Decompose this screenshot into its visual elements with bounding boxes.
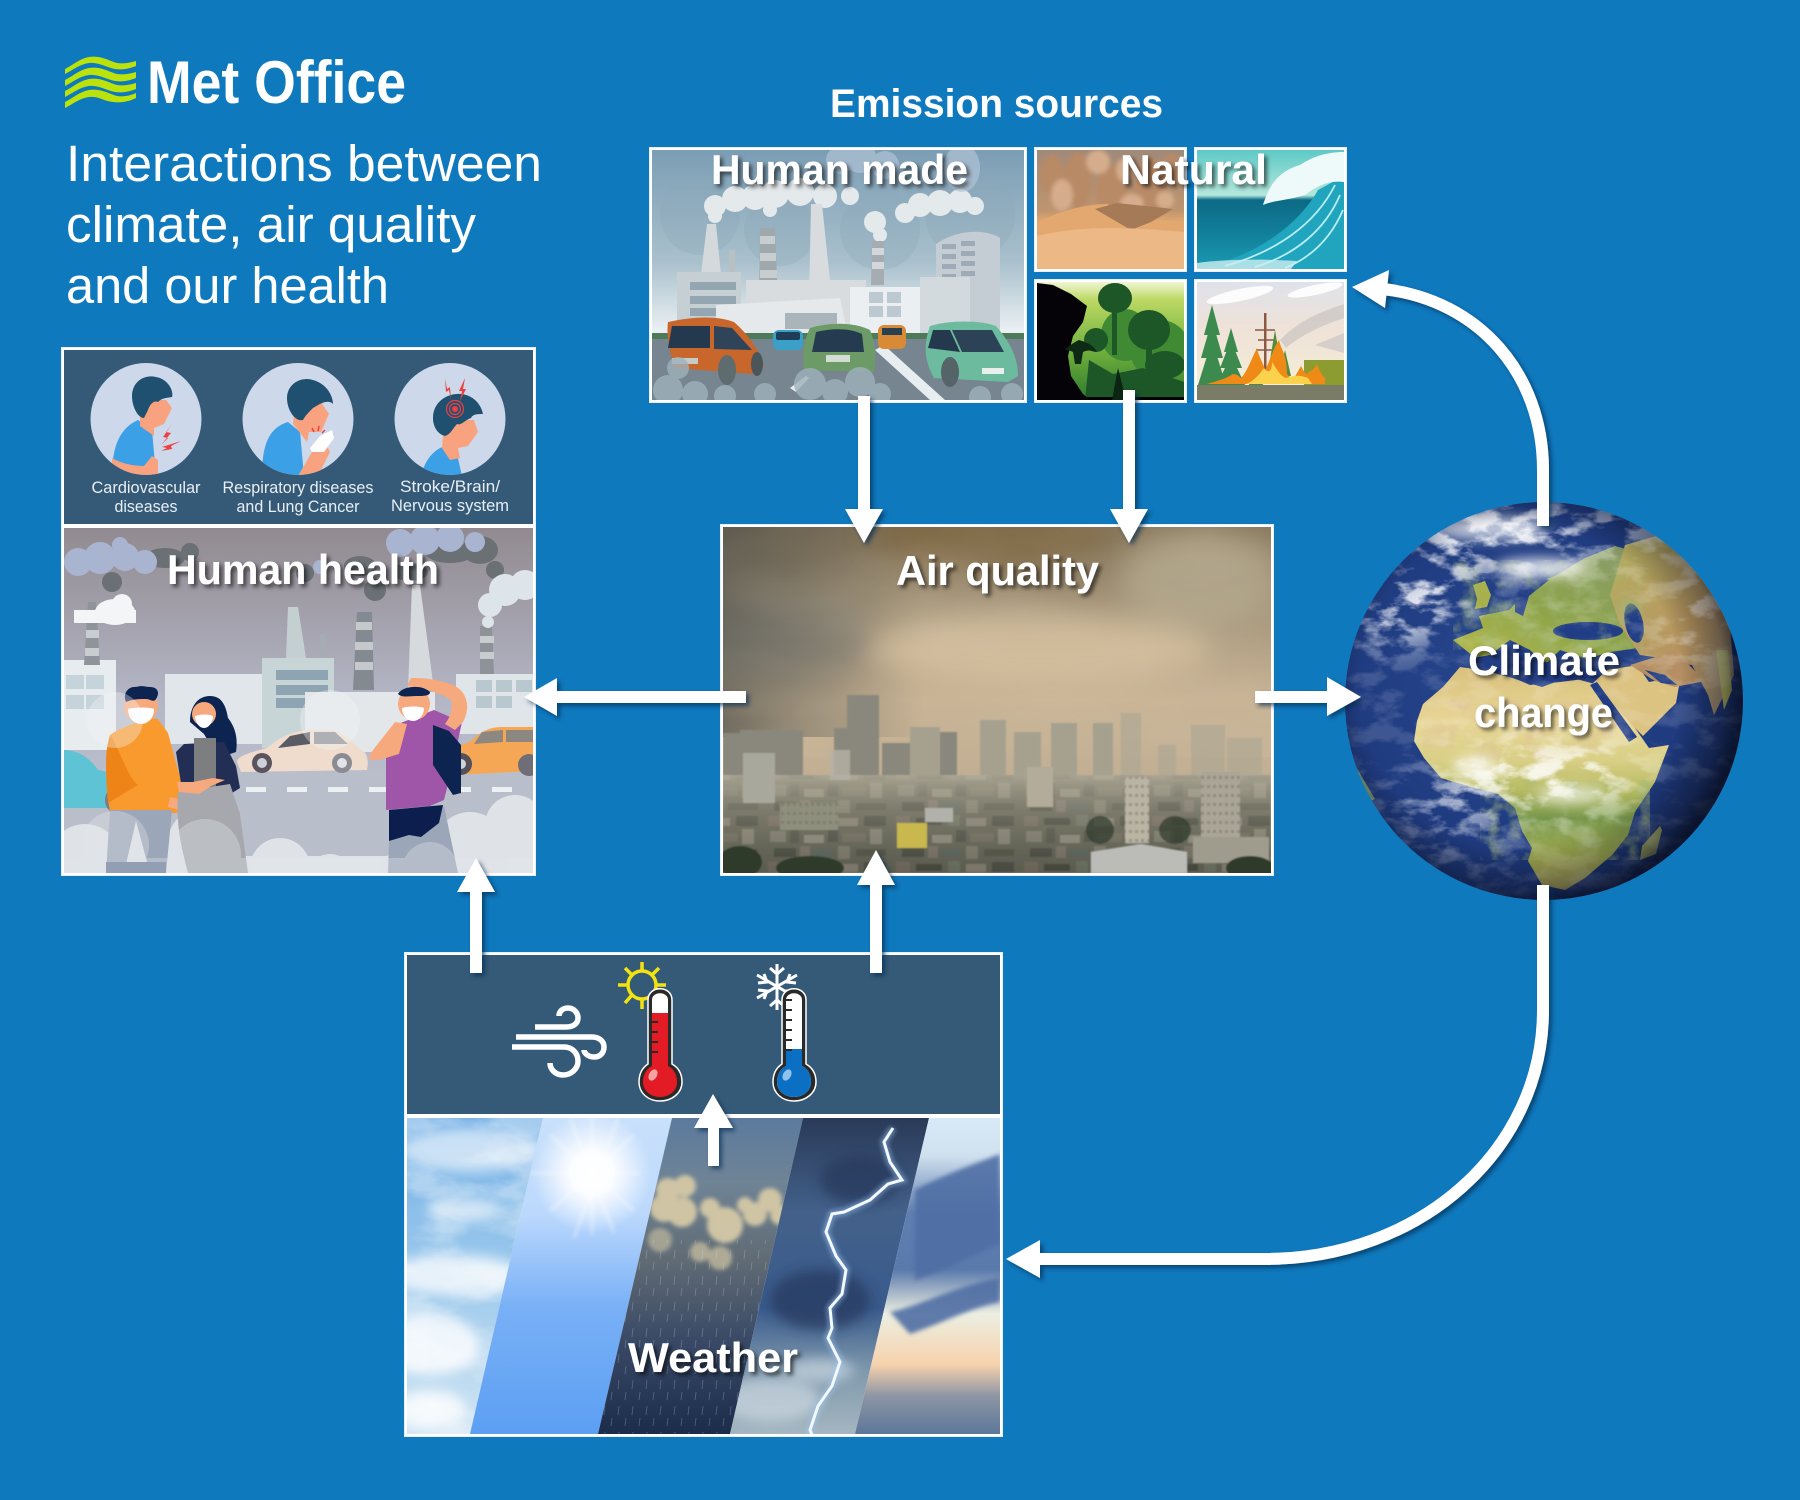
arrow: climate change to natural emissions bbox=[1352, 270, 1543, 526]
arrow: weather photo to weather icons bbox=[694, 1094, 733, 1166]
road bbox=[652, 335, 1024, 400]
land noise bbox=[1453, 560, 1643, 650]
ground fog bbox=[88, 811, 458, 873]
text: condition labels: Stroke/Brain/ bbox=[400, 477, 500, 496]
car: beige bbox=[237, 730, 368, 773]
label: Weather: Weather bbox=[628, 1334, 798, 1381]
smoke clouds bbox=[704, 178, 984, 242]
title: Interactions between bbox=[66, 135, 542, 192]
icon: cardiovascular bbox=[90, 363, 202, 476]
illustration: polluted street bbox=[64, 528, 533, 873]
car: teal bbox=[926, 322, 1018, 387]
car: orange bbox=[667, 318, 764, 385]
logo wordmark: Met Office bbox=[147, 49, 406, 116]
road bbox=[64, 770, 533, 873]
car: small blue bbox=[773, 330, 803, 350]
sub-panel: weather icons bbox=[407, 955, 1000, 1114]
label: Human made: Human made bbox=[711, 146, 968, 193]
fog behind people bbox=[64, 795, 533, 873]
label: Air quality: Air quality bbox=[896, 547, 1100, 594]
icon: respiratory bbox=[242, 363, 354, 476]
strip: sunset bbox=[850, 1118, 1000, 1434]
city skyline bbox=[718, 695, 1274, 880]
panel: weather bbox=[380, 952, 1002, 1450]
land: India bbox=[1716, 650, 1732, 710]
land: South America edge bbox=[1345, 757, 1375, 803]
land: Africa bbox=[1414, 667, 1669, 890]
arrow: weather to air quality bbox=[857, 850, 895, 973]
text: condition labels: Nervous system bbox=[391, 496, 509, 515]
panel: natural, rainforest bbox=[1034, 280, 1190, 402]
label: Human health: Human health bbox=[167, 546, 439, 593]
logo: Met Office bbox=[65, 49, 406, 116]
text: condition labels: Cardiovascular bbox=[92, 478, 201, 497]
panel: natural, desert dust bbox=[1034, 148, 1186, 272]
text: condition labels: Respiratory diseases bbox=[222, 478, 374, 497]
label: Climate change bbox=[1468, 637, 1620, 736]
panel: human made emissions bbox=[650, 141, 1026, 408]
arrow: climate change to weather bbox=[1006, 885, 1543, 1278]
arrow: human made to air quality bbox=[845, 396, 883, 543]
label: Climate change: Climate bbox=[1468, 637, 1620, 684]
car: green bbox=[803, 324, 875, 372]
panel: natural, wildfire bbox=[1194, 279, 1346, 402]
panel: air quality photo bbox=[720, 524, 1274, 876]
lower city bbox=[723, 775, 1271, 873]
strip: sun bbox=[465, 1113, 675, 1434]
strip: rain bbox=[595, 1118, 805, 1434]
car: orange bbox=[461, 727, 533, 776]
label: Natural: Natural bbox=[1120, 146, 1267, 193]
car: blue bbox=[64, 750, 110, 811]
text: condition labels: and Lung Cancer bbox=[236, 497, 360, 516]
panel: natural, ocean wave bbox=[1194, 148, 1346, 272]
title: and our health bbox=[66, 257, 389, 314]
person: man in orange sweater bbox=[106, 686, 188, 873]
arrow: air quality to human health bbox=[524, 678, 746, 716]
arrow: air quality to climate change bbox=[1255, 677, 1361, 716]
icon: wind bbox=[512, 1008, 604, 1075]
arrow: weather to human health bbox=[457, 858, 495, 973]
globe: Earth bbox=[1340, 500, 1750, 910]
person: woman bbox=[176, 696, 248, 873]
land: Europe bbox=[1453, 546, 1636, 662]
title bbox=[66, 135, 542, 314]
arrow: natural to air quality bbox=[1110, 390, 1148, 543]
heading: Emission sources: Emission sources bbox=[830, 82, 1163, 126]
icon: stroke and brain bbox=[394, 363, 506, 476]
strip: clouds bbox=[380, 1118, 547, 1434]
seas bbox=[1462, 576, 1677, 742]
land: Arabia bbox=[1593, 666, 1679, 736]
panel: human health bbox=[49, 348, 545, 902]
exhaust smoke bbox=[653, 357, 1023, 400]
label: Climate change: change bbox=[1474, 689, 1613, 736]
chimneys and factory bbox=[701, 224, 721, 275]
land: Madagascar bbox=[1640, 826, 1662, 860]
land: Asia bbox=[1610, 535, 1734, 715]
clouds bbox=[1340, 500, 1750, 910]
trees bbox=[723, 816, 1271, 873]
smoke clouds bbox=[102, 536, 504, 601]
text: condition labels bbox=[92, 477, 509, 516]
icon: hot thermometer bbox=[618, 962, 682, 1101]
icon: Met Office waves bbox=[65, 57, 136, 108]
car: small orange bbox=[878, 325, 906, 349]
strip: lightning bbox=[720, 1118, 935, 1450]
photo: weather strips bbox=[380, 1113, 1000, 1450]
icon: cold thermometer bbox=[757, 964, 816, 1101]
factories bbox=[64, 585, 533, 752]
text: condition labels: diseases bbox=[114, 497, 178, 516]
title: climate, air quality bbox=[66, 196, 476, 253]
sub-panel: health conditions bbox=[64, 350, 533, 524]
person: man in purple bbox=[369, 678, 467, 873]
